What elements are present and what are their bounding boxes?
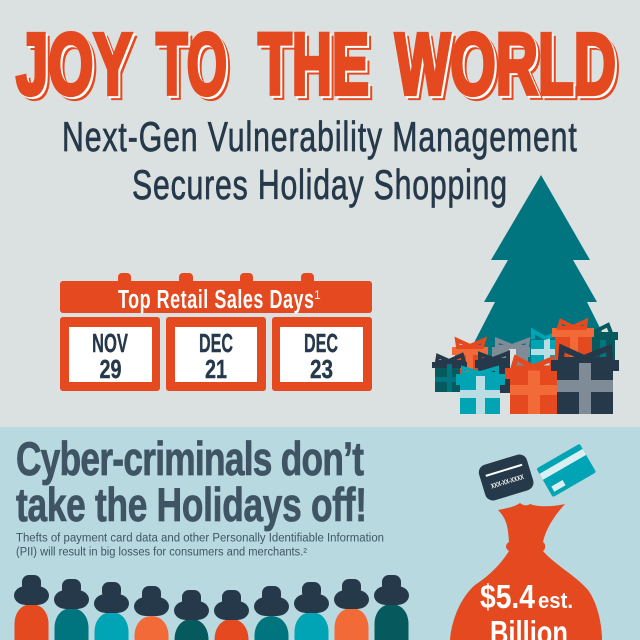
calendar header: 1 — [314, 288, 321, 302]
gift: orange back left — [452, 340, 488, 380]
gift: dark teal left — [432, 355, 467, 392]
gift: light teal back — [531, 331, 557, 370]
icon: christmas tree — [460, 175, 606, 370]
text block: thefts description: Thefts of payment card data and other Personally Identifiable Information — [16, 532, 384, 544]
date: Dec 21: 21 — [205, 354, 227, 384]
person 10 — [374, 575, 409, 640]
calendar: top retail sales days — [60, 273, 372, 391]
gift: light teal front — [456, 368, 505, 414]
person 5 — [174, 590, 209, 640]
gift: navy front — [551, 348, 619, 414]
bag amount — [480, 578, 573, 640]
gift: orange back right — [552, 321, 594, 361]
title — [16, 16, 620, 117]
person 7 — [254, 586, 289, 640]
heading: cyber-criminals: take the Holidays off! — [16, 478, 367, 531]
panel: cyber-criminals background — [0, 427, 640, 640]
title: THE — [262, 20, 373, 117]
date: Dec 23 — [272, 317, 372, 391]
person 6 — [214, 590, 249, 640]
date: Dec 21 — [166, 317, 266, 391]
title: JOY — [18, 18, 134, 115]
panel: header background — [0, 0, 640, 427]
date: Nov 29: 29 — [100, 354, 122, 384]
calendar header — [60, 281, 372, 314]
calendar tabs — [118, 273, 314, 287]
title: TO — [156, 16, 227, 113]
person 9 — [334, 579, 369, 640]
title: TO — [158, 18, 229, 115]
icon: id card — [477, 452, 535, 502]
icon: pile of gifts — [432, 321, 619, 414]
text block: thefts description — [16, 532, 384, 558]
gift: orange front — [505, 358, 557, 414]
gift: dark teal back right — [590, 325, 618, 362]
subtitle: Secures Holiday Shopping — [132, 161, 507, 208]
date: Dec 23: 23 — [310, 354, 333, 384]
person 8 — [294, 582, 329, 640]
people row — [14, 575, 409, 640]
heading: cyber-criminals — [16, 432, 367, 531]
title: TO — [160, 20, 231, 117]
date: Dec 21: DEC — [199, 328, 233, 358]
text block: thefts description: (PII) will result in big losses for consumers and merchants.² — [16, 546, 307, 558]
subtitle — [62, 113, 577, 208]
icon: id card: XXX-XX-XXXX — [490, 474, 525, 491]
title: JOY — [16, 16, 132, 113]
title: JOY — [20, 20, 136, 117]
gift: grey back — [492, 340, 530, 382]
date: Nov 29 — [60, 317, 160, 391]
heading: cyber-criminals: Cyber-criminals don’t — [16, 432, 364, 485]
title: THE — [260, 18, 371, 115]
calendar header: Top Retail Sales Days — [118, 285, 314, 314]
gift: navy small — [475, 353, 510, 393]
icon: money bag — [450, 503, 602, 640]
person 1 — [14, 575, 49, 640]
date: Dec 23: DEC — [304, 328, 338, 358]
icon: credit card — [536, 444, 596, 497]
person 4 — [134, 586, 169, 640]
person 2 — [54, 579, 89, 640]
date: Nov 29: NOV — [92, 328, 128, 358]
person 3 — [94, 582, 129, 640]
bag amount: $5.4 — [480, 578, 536, 615]
title: THE — [258, 16, 369, 113]
subtitle: Next-Gen Vulnerability Management — [62, 113, 577, 160]
